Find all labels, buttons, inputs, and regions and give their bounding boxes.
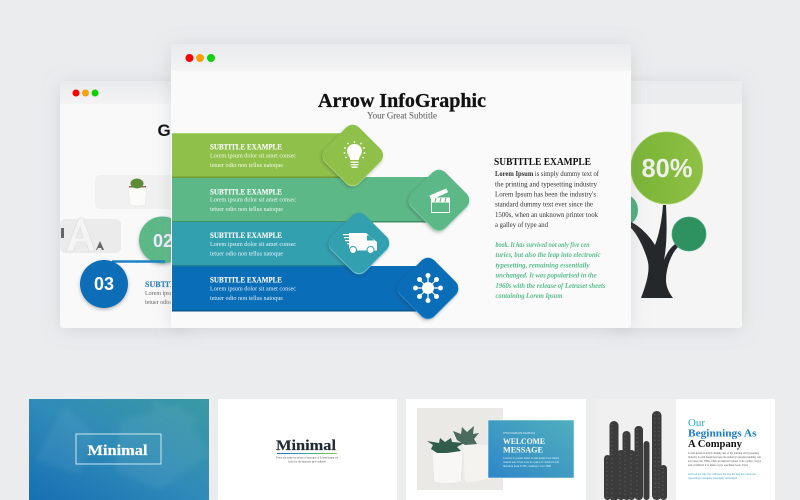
text block: description: SUBTITLE EXAMPLE xyxy=(494,157,591,168)
chart: tree with 80%: 80% xyxy=(641,155,693,183)
image: potted plants xyxy=(427,426,491,484)
arrow 2 green: Lorem ipsum dolor sit amet consec xyxy=(210,198,296,204)
thumbnail: welcome message xyxy=(406,399,586,500)
text block: description: unchanged. It was popularised in the xyxy=(496,270,597,280)
thumbnail: welcome message: random text. It has roots in a piece of classical Latin xyxy=(503,460,559,464)
thumbnail: minimal title: There are many variations of passages of Lorem Ipsum are xyxy=(276,456,339,460)
text block: description: 1960s with the release of Letraset sheets xyxy=(496,281,606,290)
arrow 4 blue: tetuer odio non tellus natoque xyxy=(210,296,283,302)
icon: network xyxy=(413,273,443,303)
thumbnail: welcome message: literature from 45 BC, making it over 2000 xyxy=(503,464,551,469)
text block: description: the printing and typesetting industry xyxy=(495,180,597,188)
thumbnail: our beginnings: industry. Lorem Ipsum has been the industry's standard dummy text xyxy=(688,455,761,459)
text block: description: 1500s, when an unknown printer took xyxy=(495,210,598,219)
image: cactus xyxy=(604,411,667,500)
thumbnail: our beginnings: ever since the 1500s, when an unknown printer took a galley of type xyxy=(688,459,762,464)
arrow 1 lime xyxy=(172,121,387,190)
icon: delivery van xyxy=(343,233,377,254)
arrow 4 blue: SUBTITLE EXAMPLE xyxy=(210,276,282,284)
thumbnail: minimal cover xyxy=(29,399,210,500)
arrow 2 green: SUBTITLE EXAMPLE xyxy=(210,188,282,196)
arrow 3 teal: Lorem ipsum dolor sit amet consec xyxy=(210,242,296,248)
panel: left background window: 02 xyxy=(153,231,173,251)
arrow 3 teal xyxy=(172,209,393,278)
arrow 1 lime: SUBTITLE EXAMPLE xyxy=(210,142,282,152)
thumbnail: welcome message: WWW.DOMAIN.NAME.DO xyxy=(503,431,536,435)
arrow 2 green: tetuer odio non tellus natoque xyxy=(210,207,283,213)
icon: light bulb xyxy=(344,141,365,168)
thumbnail: minimal title: Minimal xyxy=(276,438,336,454)
thumbnail: minimal title: looks for the majority have suffered xyxy=(288,460,327,464)
text block: description: a galley of type and xyxy=(495,220,548,229)
arrow 4 blue xyxy=(172,254,462,323)
thumbnail: our beginnings xyxy=(595,399,775,500)
text block: description: typesetting, remaining essentially xyxy=(496,260,590,270)
thumbnail: our beginnings: Beginnings As xyxy=(688,428,757,440)
thumbnail: our beginnings: Our xyxy=(688,418,706,429)
thumbnail: welcome message: MESSAGE xyxy=(503,444,543,454)
icon: clapperboard xyxy=(430,189,450,212)
thumbnail: welcome message: WELCOME xyxy=(503,436,545,446)
text block: description: containing Lorem Ipsum xyxy=(496,291,563,300)
thumbnail: minimal title xyxy=(218,399,397,500)
text block: description: turies, but also the leap into electronic xyxy=(496,250,601,259)
text block: description: standard dummy text ever since the xyxy=(495,200,594,208)
arrow 4 blue: Lorem ipsum dolor sit amet consec xyxy=(210,286,296,292)
window controls xyxy=(186,54,215,62)
thumbnail: welcome message: Contrary to popular belief, Lorem Ipsum is not simply xyxy=(503,456,559,461)
panel: left background window: SUBTITLE xyxy=(145,280,185,289)
thumbnail: minimal cover: Minimal xyxy=(88,443,148,459)
thumbnail: our beginnings: typesetting, remaining essentially unchanged xyxy=(688,476,737,481)
chart: tree with 80% xyxy=(604,132,706,298)
panel: left background window: Gr xyxy=(158,121,178,140)
arrow 2 green xyxy=(172,166,473,235)
arrow 3 teal: SUBTITLE EXAMPLE xyxy=(210,231,282,240)
arrow 3 teal: tetuer odio non tellus natoque xyxy=(210,252,283,258)
text block: description: book. It has survived not only five cen xyxy=(496,240,590,249)
panel: left background window: 03 xyxy=(94,274,114,294)
thumbnail: our beginnings: Lorem Ipsum is simply dummy text of the printing and typesetting xyxy=(688,451,759,455)
thumbnail: our beginnings: A Company xyxy=(688,439,742,450)
panel: main window xyxy=(171,44,631,328)
text block: description: Lorem Ipsum has been the industry's xyxy=(495,190,596,198)
arrow 1 lime: tetuer odio non tellus natoque xyxy=(210,163,283,169)
panel: left background window: tetuer odio xyxy=(145,300,171,306)
arrow 1 lime: Lorem ipsum dolor sit amet consec xyxy=(210,154,296,160)
panel: left background window xyxy=(60,81,190,328)
panel: left background window: Lorem ipsum xyxy=(145,291,177,297)
title: Arrow InfoGraphic xyxy=(318,90,486,112)
panel: right background window xyxy=(610,81,742,328)
text block: description xyxy=(494,157,606,300)
thumbnail: our beginnings: survived not only five centuries, but also the leap into electronic xyxy=(688,472,757,477)
subtitle: Your Great Subtitle xyxy=(367,112,437,122)
thumbnail: our beginnings: and scrambled it to make a type specimen book. It has xyxy=(688,463,749,467)
text block: description: Lorem Ipsum is simply dummy text of xyxy=(495,169,599,178)
